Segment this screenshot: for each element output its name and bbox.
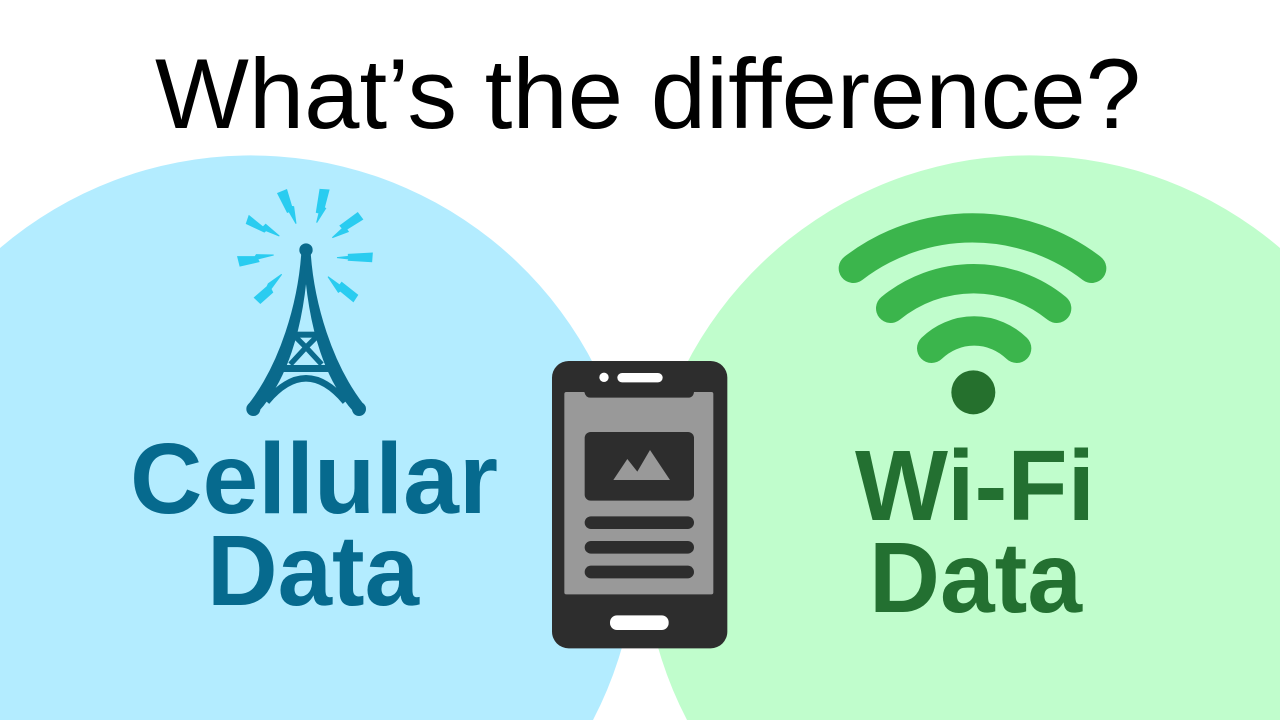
speaker [617, 373, 663, 382]
icon: cell tower with signal bolts [238, 189, 372, 416]
notch [584, 390, 694, 398]
mountains [613, 450, 670, 480]
title: What’s the difference? [155, 38, 1141, 149]
background circle: wi-fi [643, 155, 1280, 720]
home button [610, 615, 669, 630]
label: wi-fi data: Wi-Fi [855, 430, 1095, 542]
label: cellular data: Data [207, 515, 420, 627]
icon: smartphone [552, 361, 727, 648]
tower structure [246, 243, 366, 416]
wi-fi arcs [853, 228, 1092, 348]
image placeholder [585, 432, 694, 501]
label: cellular data [130, 423, 498, 627]
background circle: cellular [0, 155, 637, 720]
signal bolts [238, 189, 372, 303]
text lines [585, 516, 694, 578]
label: wi-fi data [855, 430, 1095, 634]
icon: wi-fi symbol [853, 228, 1092, 414]
screen [564, 392, 713, 594]
label: wi-fi data: Data [869, 522, 1083, 634]
label: cellular data: Cellular [130, 423, 498, 535]
camera dot [599, 373, 609, 382]
